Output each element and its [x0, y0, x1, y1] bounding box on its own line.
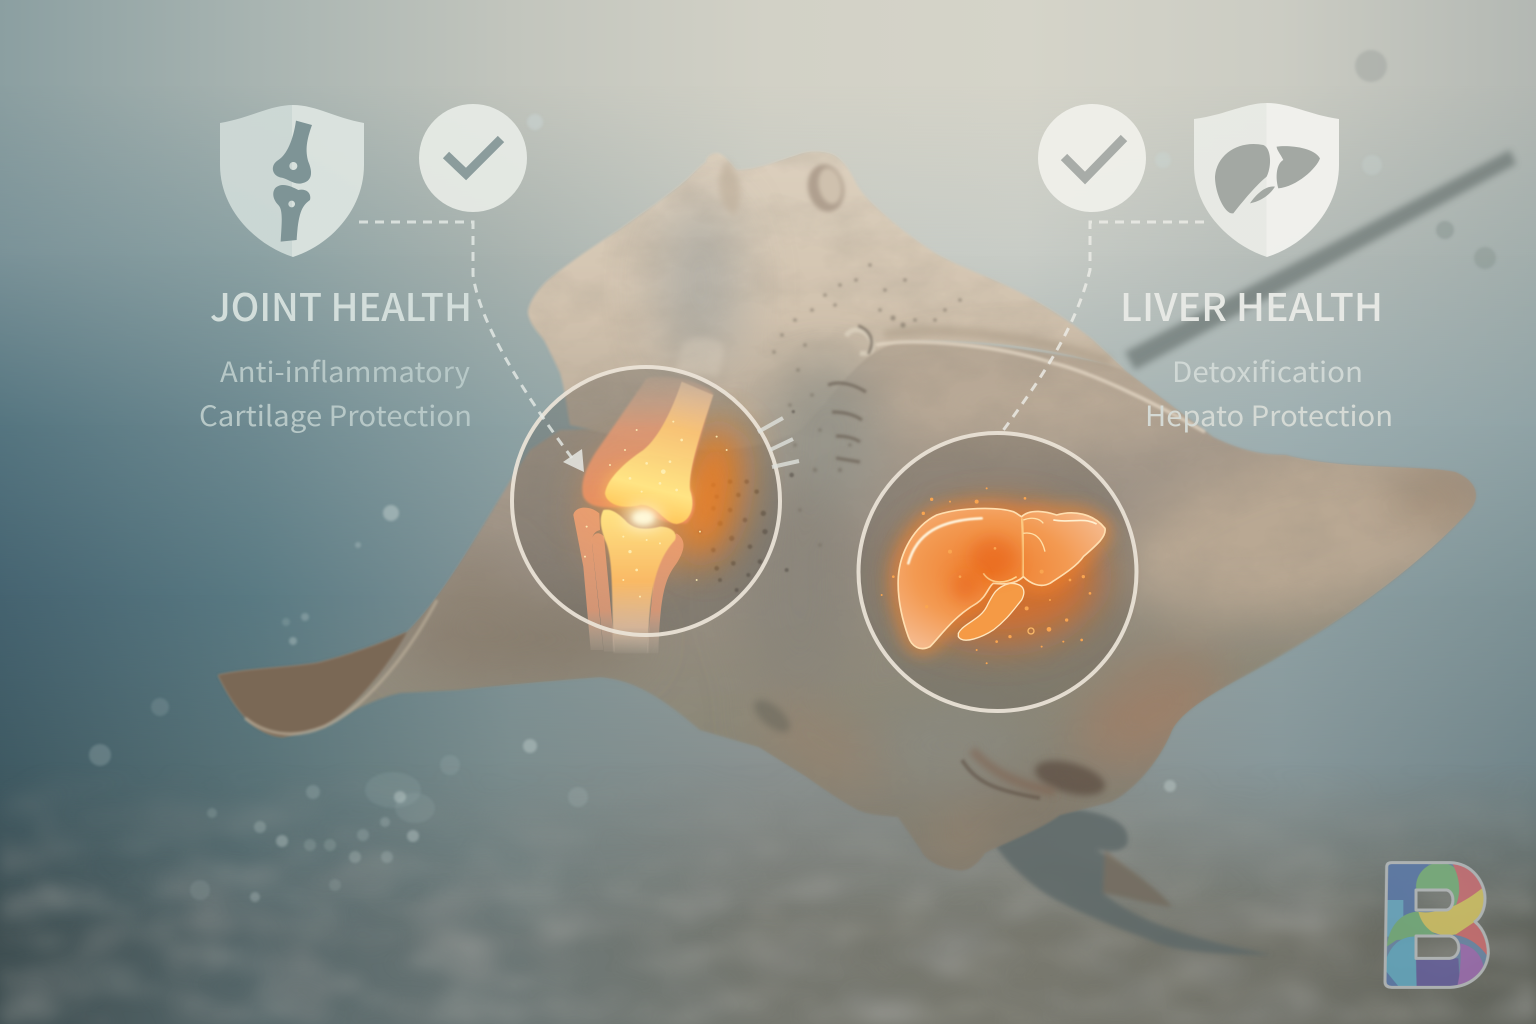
liver particles — [881, 487, 1091, 664]
icon: liver check badge — [1038, 104, 1146, 212]
ray dark spots inside joint circle — [698, 410, 795, 592]
liver ring — [858, 433, 1136, 711]
ray gill slits — [828, 326, 872, 462]
text: detoxification: Detoxification — [1172, 351, 1363, 391]
ray left wing fold line — [245, 600, 437, 734]
ray skin spots — [772, 263, 962, 547]
text: cartilage protection: Cartilage Protection — [199, 395, 472, 435]
liver lobe lines and highlights — [1022, 518, 1023, 577]
left info: joint health — [199, 104, 527, 435]
joint glow — [625, 507, 662, 528]
text: anti-inflammatory: Anti-inflammatory — [220, 351, 470, 391]
liver callout circle — [858, 433, 1136, 711]
fibula layers — [573, 508, 603, 650]
liver glow — [900, 510, 1100, 643]
joint callout circle — [512, 338, 799, 653]
text: hepato protection: Hepato Protection — [1145, 395, 1393, 435]
liver illustration — [881, 487, 1105, 664]
manta ray — [200, 140, 1512, 980]
ray lower tail — [995, 807, 1273, 955]
ray wing edge highlight — [876, 342, 1205, 432]
ray underside marks — [749, 694, 1109, 802]
dashed connector: joint — [359, 222, 572, 458]
femur bone — [605, 382, 713, 524]
icon: joint check badge — [419, 104, 527, 212]
femur bright halo — [607, 467, 687, 513]
right info: liver health — [1038, 103, 1393, 435]
bone particles — [584, 421, 728, 598]
femur outer layer — [582, 377, 713, 524]
ray shadow above fold — [884, 331, 1110, 362]
ray left wing tip — [218, 632, 407, 737]
heading: liver health: LIVER HEALTH — [1120, 277, 1383, 332]
joint ring — [512, 367, 780, 635]
icon: joint shield — [220, 105, 364, 257]
arrowhead: joint — [563, 449, 584, 472]
ray eye — [803, 161, 849, 215]
dashed connector: liver — [1002, 222, 1204, 432]
gill tick marks — [758, 418, 799, 467]
liver lower lobe — [958, 583, 1024, 640]
ray body and wings — [218, 341, 1476, 870]
bubbles — [89, 50, 1496, 902]
heading: joint health: JOINT HEALTH — [210, 277, 472, 332]
logo: rainbow letter B — [1383, 861, 1490, 989]
icon: liver shield — [1194, 103, 1339, 257]
femur ghost above circle — [676, 338, 724, 376]
tibia bone — [601, 510, 676, 653]
knee joint illustration — [573, 377, 752, 653]
ray head — [528, 152, 1130, 450]
orange glow behind knee — [668, 419, 752, 567]
liver outer glow — [898, 508, 1105, 649]
ray shading — [241, 112, 1476, 854]
ray horn shading — [719, 160, 740, 215]
ray tail — [1125, 150, 1516, 370]
liver main shape — [898, 508, 1105, 649]
